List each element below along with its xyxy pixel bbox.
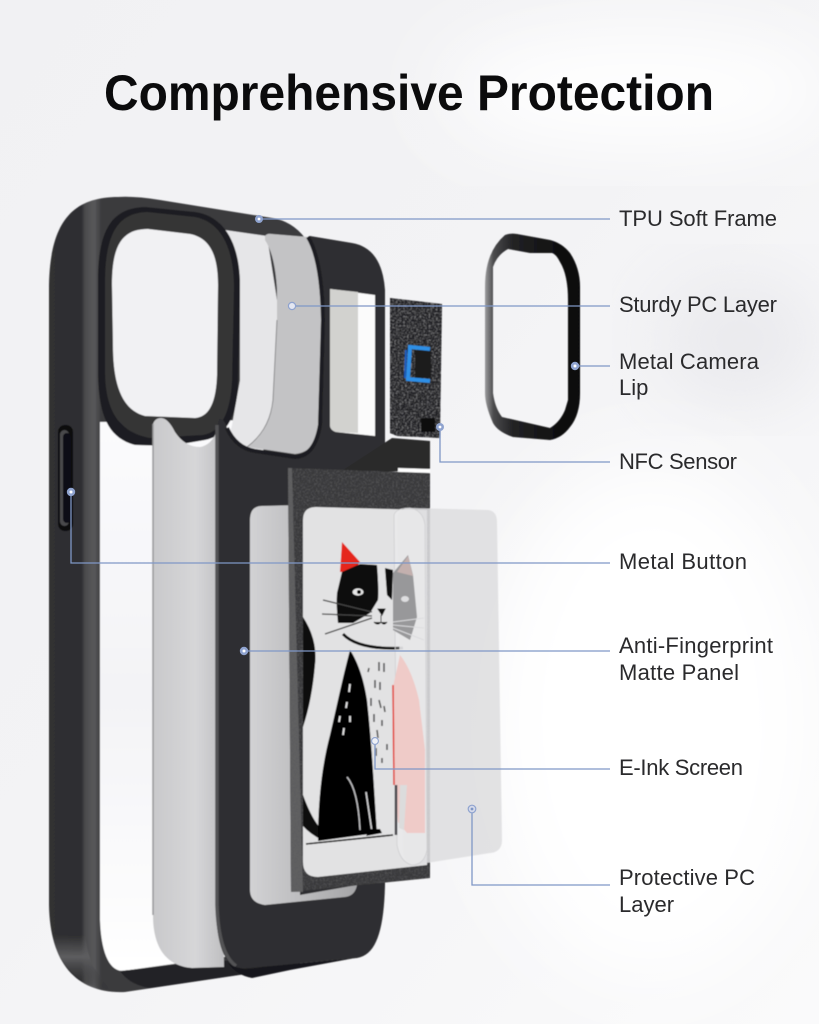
leader: NFC sensor bbox=[436, 423, 610, 462]
NFC sensor bbox=[343, 298, 442, 475]
leader: matte panel bbox=[240, 647, 610, 655]
leader: metal camera lip bbox=[571, 362, 610, 370]
metal button bbox=[58, 425, 73, 531]
label: anti-fingerprint matte panel: Matte Panel bbox=[619, 660, 739, 685]
back panel window bbox=[330, 289, 375, 436]
leader: TPU soft frame bbox=[255, 215, 610, 223]
cat seen through the film bbox=[393, 555, 425, 835]
label: metal button: Metal Button bbox=[619, 549, 747, 574]
sturdy PC layer camera section bbox=[247, 234, 323, 454]
e-ink screen bbox=[303, 507, 427, 877]
label: TPU soft frame: TPU Soft Frame bbox=[619, 206, 777, 231]
label: protective PC layer: Layer bbox=[619, 892, 674, 917]
sturdy PC layer body bbox=[153, 418, 224, 968]
leader: e-ink screen bbox=[372, 738, 610, 769]
label: sturdy PC layer: Sturdy PC Layer bbox=[619, 292, 777, 317]
label: NFC sensor: NFC Sensor bbox=[619, 449, 737, 474]
label: e-ink screen: E-Ink Screen bbox=[619, 755, 743, 780]
protective PC layer bbox=[393, 508, 502, 865]
camera cut-out background bbox=[225, 230, 277, 455]
camera ring bbox=[98, 207, 240, 446]
label: metal camera lip: Lip bbox=[619, 375, 648, 400]
leader: sturdy PC layer bbox=[288, 302, 610, 310]
black back panel bbox=[216, 236, 385, 978]
cat illustration bbox=[303, 542, 403, 844]
label: protective PC layer: Protective PC bbox=[619, 865, 755, 890]
leader: metal button bbox=[67, 488, 610, 563]
label: anti-fingerprint matte panel: Anti-Fingerprint bbox=[619, 633, 773, 658]
label: metal camera lip: Metal Camera bbox=[619, 349, 760, 374]
metal camera lip bbox=[485, 234, 580, 440]
anti-fingerprint matte panel bbox=[250, 505, 357, 905]
phone case exploded view bbox=[49, 197, 580, 992]
title: Comprehensive Protection bbox=[104, 65, 714, 121]
TPU soft frame bbox=[49, 197, 330, 992]
leader: protective PC layer bbox=[468, 805, 610, 885]
felt backing bbox=[288, 468, 430, 892]
